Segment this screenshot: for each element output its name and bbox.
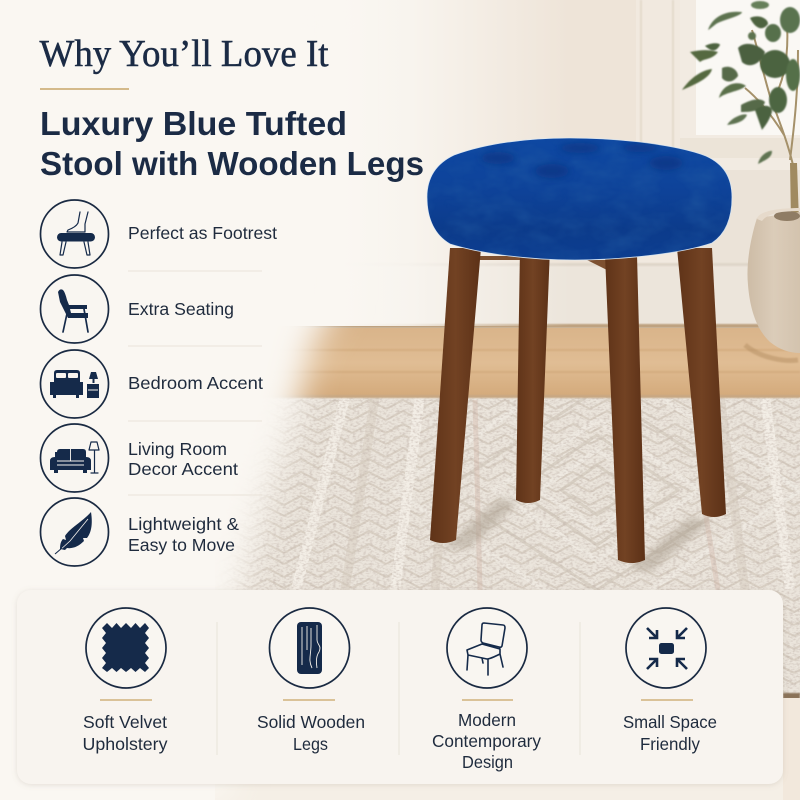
background: room scene [228, 0, 800, 800]
rug shadows [442, 498, 710, 572]
plant [682, 1, 800, 222]
icon: sofa and lamp [40, 424, 108, 492]
feature: soft velvet [82, 608, 168, 754]
label: modern design: Design [462, 752, 513, 772]
label: footrest: Perfect as Footrest [128, 223, 277, 243]
icon: bed and nightstand [40, 350, 108, 418]
item: footrest [40, 200, 277, 268]
label: small space: Friendly [640, 734, 700, 754]
label: solid wood: Legs [293, 734, 328, 754]
left fade overlay [0, 0, 570, 800]
label: solid wood: Solid Wooden [257, 712, 365, 732]
icon: wooden log [270, 608, 350, 688]
item: extra seating [40, 275, 234, 343]
icon: velvet swatch [86, 608, 166, 688]
item: bedroom [40, 350, 263, 418]
label: extra seating: Extra Seating [128, 299, 234, 319]
icon: compact arrows [626, 608, 706, 688]
plant pot [747, 208, 800, 353]
feature: small space [623, 608, 717, 754]
stool [420, 130, 740, 572]
label: modern design: Contemporary [432, 731, 541, 751]
title: Why You’ll Love It [40, 33, 329, 75]
velvet seat [426, 138, 732, 260]
label: living room: Living Room [128, 439, 227, 459]
icon: armchair [40, 275, 108, 343]
bottom panel [17, 590, 783, 784]
icon: feather [40, 498, 108, 566]
label: soft velvet: Upholstery [82, 734, 168, 754]
heading: product name: Stool with Wooden Legs [40, 145, 424, 182]
label: bedroom: Bedroom Accent [128, 373, 263, 393]
stool legs [430, 248, 726, 563]
icon: foot on stool [40, 200, 108, 268]
item: lightweight [40, 498, 239, 566]
label: modern design: Modern [458, 710, 516, 730]
icon: dining chair [447, 608, 527, 688]
feature: solid wood [257, 608, 365, 754]
label: small space: Small Space [623, 712, 717, 732]
label: living room: Decor Accent [128, 459, 238, 479]
item: living room [40, 424, 238, 492]
label: lightweight: Lightweight & [128, 514, 239, 534]
label: soft velvet: Soft Velvet [83, 712, 167, 732]
label: lightweight: Easy to Move [128, 535, 235, 555]
rug [228, 397, 800, 695]
list: uses [40, 200, 277, 566]
heading: product name: Luxury Blue Tufted [40, 105, 347, 142]
window [680, 0, 800, 265]
feature: modern design [432, 608, 541, 772]
